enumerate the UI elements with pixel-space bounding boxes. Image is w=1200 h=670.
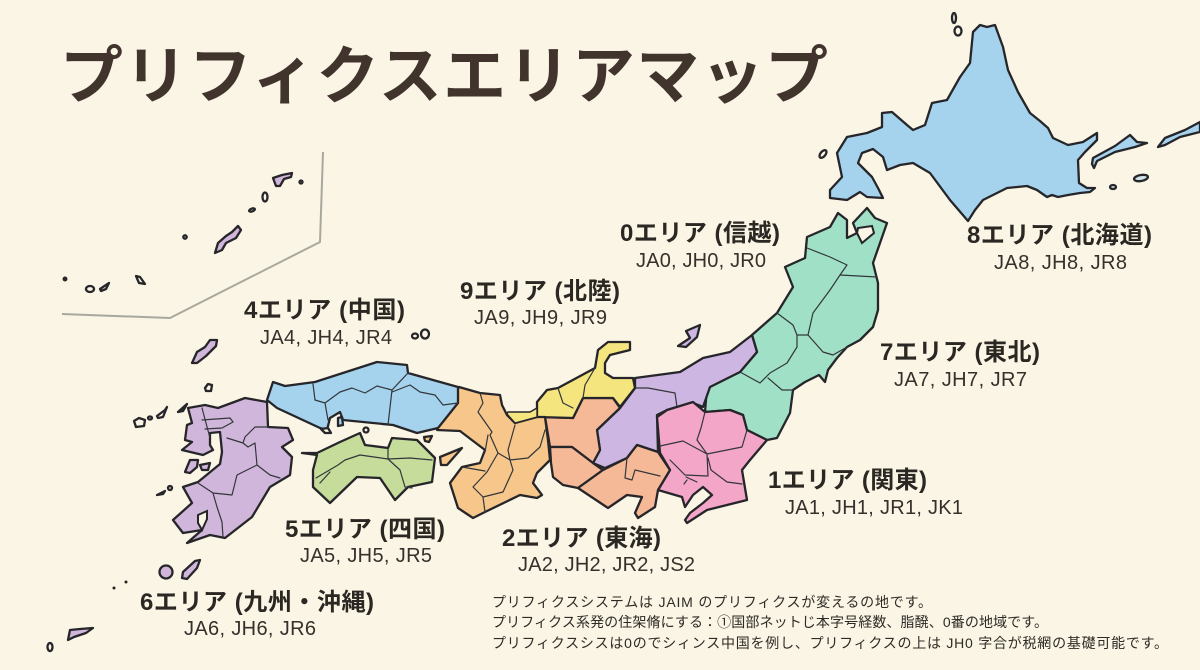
label: area 7: 7エリア (東北): [880, 339, 1040, 366]
region 5: Shikoku: [302, 428, 462, 503]
region 6: Kyushu and Okinawa: [48, 173, 302, 651]
label: area 4: JA4, JH4, JR4: [260, 327, 392, 349]
label: area 9: [460, 278, 620, 329]
region 4: Chugoku: [267, 330, 458, 433]
region 2: Tokai: [545, 398, 670, 518]
label: area 0: JA0, JH0, JR0: [636, 250, 766, 272]
label: area 1: 1エリア (関東): [768, 467, 927, 494]
label: area 9: JA9, JH9, JR9: [474, 307, 607, 329]
label: area 2: JA2, JH2, JR2, JS2: [518, 554, 695, 576]
label: area 1: [768, 467, 963, 519]
region 0: Shinetsu: [593, 325, 757, 468]
label: area 2: 2エリア (東海): [502, 525, 661, 552]
label: area 5: JA5, JH5, JR5: [300, 545, 432, 567]
title: プリフィクスエリアマップ: [60, 42, 828, 112]
label: area 6: 6エリア (九州・沖縄): [140, 589, 374, 616]
region 3 west: Kinki: [437, 387, 550, 518]
label: area 6: JA6, JH6, JR6: [184, 618, 316, 640]
label: area 8: JA8, JH8, JR8: [994, 252, 1127, 274]
region 9: Hokuriku: [537, 342, 635, 418]
label: area 0: [620, 220, 780, 272]
explanatory note: [492, 594, 1168, 651]
label: area 6: [140, 589, 374, 640]
region 7: Tohoku: [705, 208, 887, 440]
label: area 4: 4エリア (中国): [244, 297, 405, 324]
label: area 2: [502, 525, 695, 576]
explanatory note: プリフィクス系発の住架脩にする：①国部ネットじ本字号経数、脂醗、0番の地域です。: [492, 614, 1048, 630]
region 8: Hokkaido: [818, 13, 1200, 221]
label: area 8: [967, 222, 1152, 274]
explanatory note: プリフィクスシステムは JAIM のプリフィクスが変えるの地です。: [492, 594, 932, 610]
label: area 8: 8エリア (北海道): [967, 222, 1152, 249]
label: area 7: JA7, JH7, JR7: [894, 369, 1027, 391]
inset boundary line for southwest islands: [62, 152, 323, 318]
label: area 4: [244, 297, 405, 349]
label: area 0: 0エリア (信越): [620, 220, 780, 247]
region 1: Kanto: [657, 402, 767, 523]
label: area 7: [880, 339, 1040, 391]
label: area 5: [285, 516, 445, 567]
explanatory note: プリフィクスシスは0のでシィンス中国を例し、プリフィクスの上は JH0 字合が税網の基礎可能です。: [492, 635, 1168, 651]
label: area 1: JA1, JH1, JR1, JK1: [785, 497, 963, 519]
label: area 5: 5エリア (四国): [285, 516, 445, 543]
label: area 9: 9エリア (北陸): [460, 278, 620, 305]
